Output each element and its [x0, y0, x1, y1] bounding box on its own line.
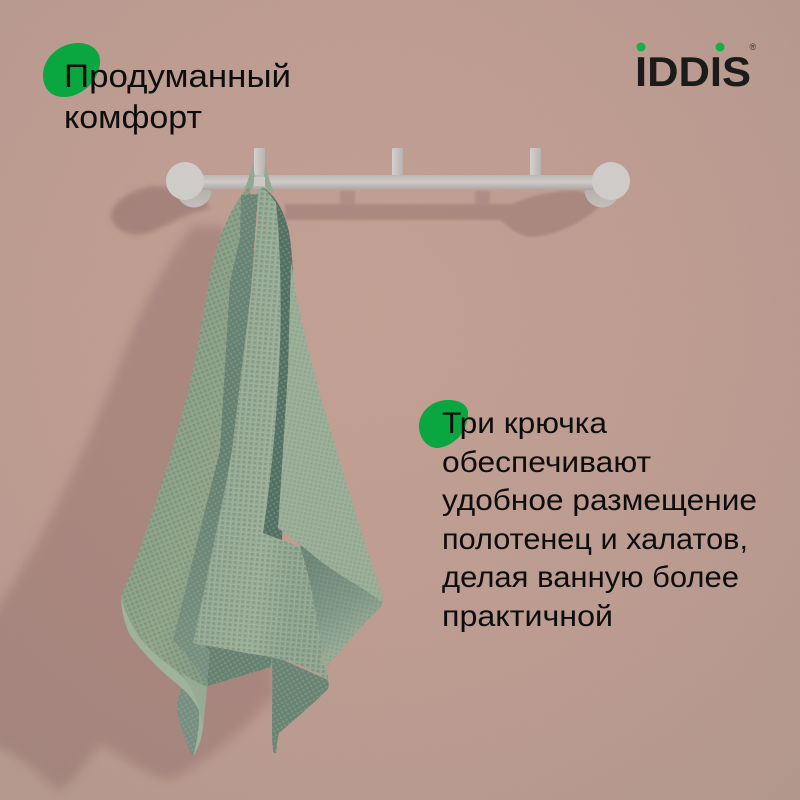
dark fold strip [173, 194, 258, 684]
logo wordmark: IDDIS [635, 48, 751, 95]
right panel [278, 262, 383, 601]
body text [442, 407, 757, 633]
logo: IDDIS [635, 42, 756, 95]
towel loop [244, 163, 274, 192]
body text: Три крючка [442, 407, 607, 440]
rail bar [198, 175, 593, 190]
left panel [121, 186, 258, 687]
left end disc [166, 162, 204, 200]
body text: делая ванную более [442, 561, 739, 594]
right end disc [592, 162, 630, 200]
left wall mount [176, 172, 212, 208]
heading: Продуманный [64, 58, 291, 94]
heading [64, 58, 291, 135]
logo dot 2 [716, 42, 724, 52]
hook 3 [530, 148, 541, 176]
lower right inner fold [300, 545, 383, 668]
hanging towel [121, 163, 383, 757]
heading: комфорт [64, 99, 202, 135]
small left tip underside [177, 685, 199, 757]
left hem [121, 597, 203, 757]
wall shadows [0, 186, 607, 790]
body accent blob [419, 400, 468, 448]
lower right tip [272, 655, 329, 753]
towel rail with three hooks [166, 148, 630, 208]
body text: удобное размещение [442, 484, 757, 517]
hook 2 [392, 148, 403, 176]
shadow: towel [0, 226, 275, 790]
logo registered mark: ® [750, 42, 756, 52]
shadow: rail [285, 191, 607, 237]
body text: практичной [442, 600, 613, 633]
body text: полотенец и халатов, [442, 523, 748, 556]
left tip light band [180, 672, 207, 730]
right wall mount [584, 172, 620, 208]
logo dot 1 [636, 42, 646, 52]
body text: обеспечивают [442, 446, 651, 479]
hook 1 [254, 148, 265, 176]
inner dark under centre [205, 640, 272, 686]
heading accent blob [43, 43, 100, 97]
centre panel [193, 187, 328, 680]
shadow: hooks [340, 191, 490, 204]
shadow: left disc [111, 186, 210, 234]
back fold dark [255, 187, 293, 540]
